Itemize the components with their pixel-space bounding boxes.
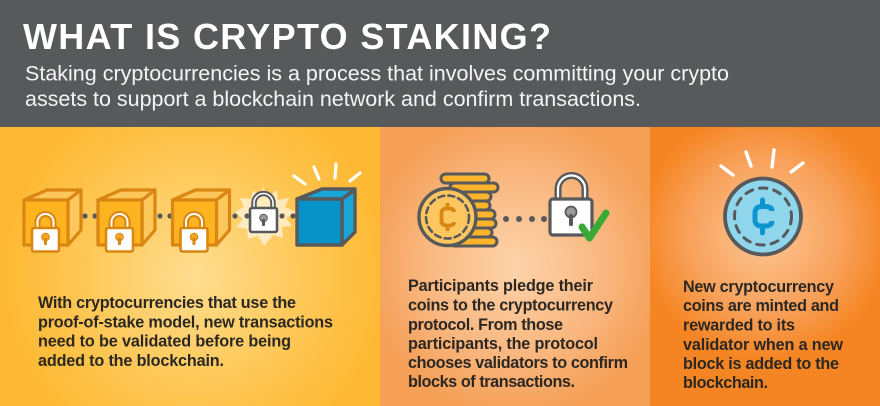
icon: minted blue coin xyxy=(725,178,801,254)
icon: chain of locked blocks xyxy=(24,164,360,252)
text block: proof of stake xyxy=(38,294,333,370)
connector dots xyxy=(503,216,547,222)
text block: pledge: protocol. From those xyxy=(408,316,563,334)
coin symbol xyxy=(442,203,454,231)
text block: rewards: New cryptocurrency xyxy=(683,278,834,296)
text block: rewards: blockchain. xyxy=(683,374,768,392)
text block: pledge: chooses validators to confirm xyxy=(408,354,628,372)
front coin xyxy=(419,188,476,246)
icon: lock glow burst xyxy=(235,187,296,246)
check mark xyxy=(582,213,606,238)
panel: pledge coins xyxy=(380,127,650,406)
coin symbol xyxy=(755,200,772,233)
icon: locked block 3 xyxy=(172,190,230,252)
text block: proof of stake: need to be validated before being xyxy=(38,332,291,350)
text block: rewards: coins are minted and xyxy=(683,297,839,315)
icon: coin stack xyxy=(419,174,498,246)
text block: pledge: coins to the cryptocurrency xyxy=(408,296,613,314)
header band xyxy=(0,0,880,127)
connector dots xyxy=(72,213,296,219)
icon: lock with check xyxy=(550,176,606,238)
text block: rewards xyxy=(683,278,843,392)
icon: sparkle rays xyxy=(294,164,360,184)
text block: rewards: block is added to the xyxy=(683,355,839,373)
text block: rewards: rewarded to its xyxy=(683,316,795,334)
text block: pledge xyxy=(408,277,628,391)
text block: proof of stake: With cryptocurrencies that use the xyxy=(38,294,296,312)
icon: new blue block xyxy=(297,189,355,245)
icon: locked block 1 xyxy=(24,190,81,252)
text block: pledge: Participants pledge their xyxy=(408,277,594,295)
icon: locked block 2 xyxy=(98,190,155,252)
panel: proof-of-stake xyxy=(0,127,380,406)
coin stack bars xyxy=(441,174,498,246)
icon: sparkle rays xyxy=(721,150,803,175)
title: WHAT IS CRYPTO STAKING? xyxy=(23,16,551,57)
subtitle xyxy=(25,62,729,111)
text block: proof of stake: added to the blockchain. xyxy=(38,352,224,370)
icon: glowing lock xyxy=(250,194,277,232)
subtitle: assets to support a blockchain network and confirm transactions. xyxy=(25,87,641,111)
text block: rewards: validator when a new xyxy=(683,336,843,354)
text block: proof of stake: proof-of-stake model, new transactions xyxy=(38,314,333,332)
text block: pledge: participants, the protocol xyxy=(408,335,598,353)
subtitle: Staking cryptocurrencies is a process that involves committing your crypto xyxy=(25,62,729,86)
panel: rewards xyxy=(650,127,880,406)
text block: pledge: blocks of transactions. xyxy=(408,373,575,391)
